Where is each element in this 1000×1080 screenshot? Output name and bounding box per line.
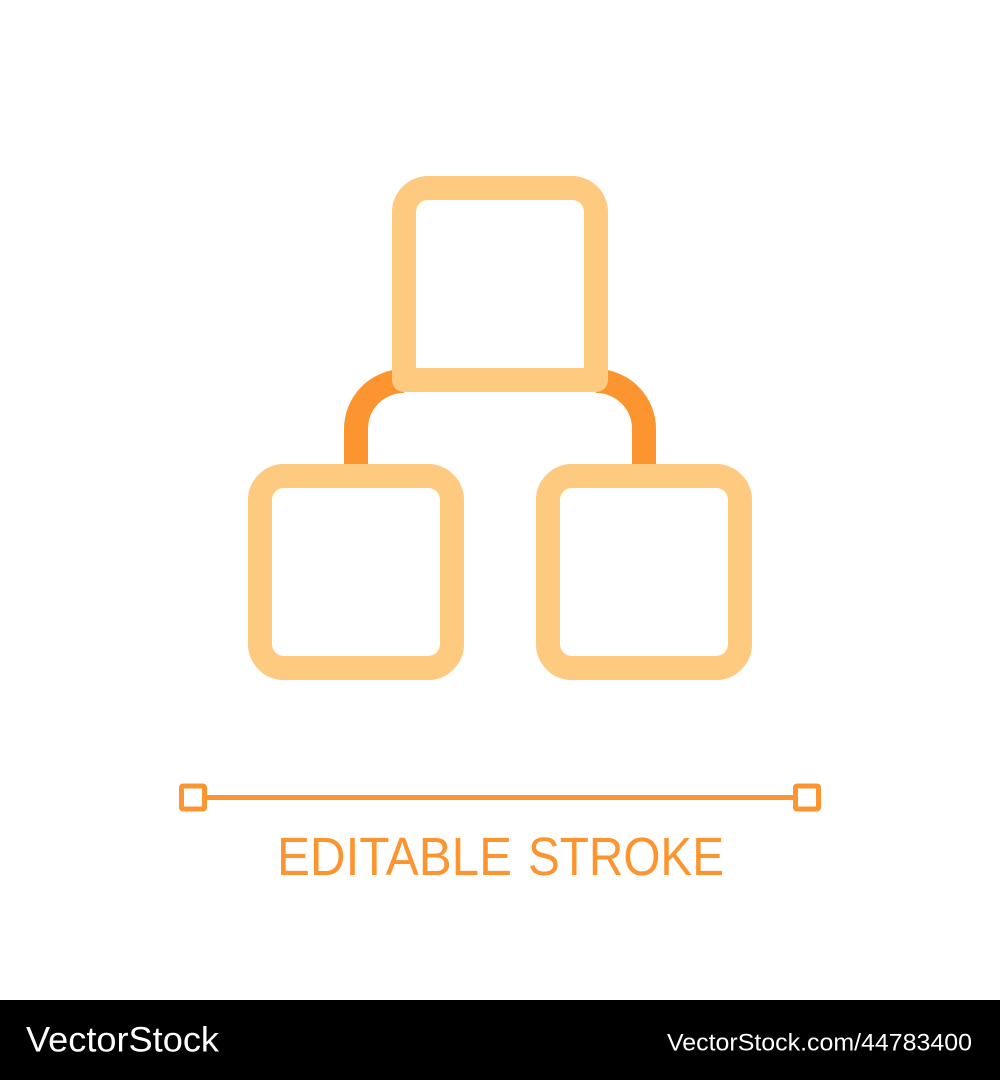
connector: left branch	[356, 381, 404, 470]
footer image id: VectorStock.com/44783400	[667, 1030, 972, 1056]
bottom left box	[260, 476, 452, 668]
connector: right branch	[596, 381, 644, 470]
footer logo: VectorStock	[26, 1020, 220, 1060]
caption: editable stroke	[277, 827, 724, 887]
top box	[392, 176, 608, 392]
editable stroke line with handles	[182, 786, 818, 809]
bottom right box	[548, 476, 740, 668]
caption: editable stroke: EDITABLE	[277, 827, 512, 887]
caption: editable stroke: STROKE	[528, 827, 724, 887]
icon: hierarchy diagram	[260, 176, 740, 668]
footer bar	[0, 1000, 1000, 1080]
